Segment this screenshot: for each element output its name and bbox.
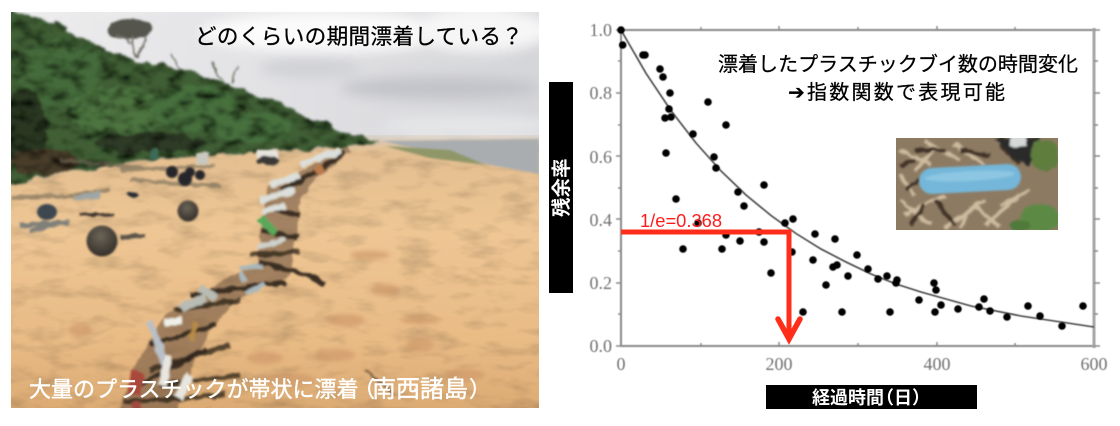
x-axis label: elapsed days: 経過時間: [812, 388, 884, 408]
caption: plastic band on beach: 大量のプラスチックが帯状に漂着: [29, 377, 359, 402]
arrow head: [778, 319, 800, 339]
y-axis tick labels: 0.8: [590, 83, 612, 103]
y-axis tick labels: 0.4: [590, 210, 612, 230]
mooring buoys: [37, 166, 205, 256]
y-axis tick labels: 0.0: [590, 336, 612, 356]
label: 1/e value: 1/e=0.368: [640, 211, 722, 231]
y-axis label: residual rate: 残余率: [550, 158, 573, 217]
y-axis tick labels: 0.2: [590, 273, 612, 293]
chart annotation text: ➔指数関数で表現可能: [788, 81, 1005, 104]
chart annotation text: [718, 52, 1078, 104]
data points: [617, 26, 1087, 330]
inset photo: blue plastic buoy: [896, 136, 1060, 232]
x-axis tick labels: 200: [766, 354, 792, 374]
chart annotation text: 漂着したプラスチックブイ数の時間変化: [718, 52, 1078, 76]
y-axis tick labels: 0.6: [590, 147, 612, 167]
x-axis label: elapsed days: [766, 385, 977, 409]
axes frame: [616, 26, 1100, 348]
red guide: 1/e value to elapsed time: [621, 232, 800, 340]
x-axis label: elapsed days: （: [876, 388, 894, 408]
exponential decay curve: [621, 30, 1094, 327]
y-axis tick labels: [590, 20, 612, 356]
debris: [11, 148, 395, 418]
chart: residual rate over elapsed days: [590, 20, 1108, 374]
x-axis tick labels: 0: [616, 354, 626, 374]
x-axis label: elapsed days: 日: [894, 388, 912, 408]
caption: plastic band on beach: 南西諸島: [372, 376, 468, 403]
x-axis tick labels: 600: [1080, 354, 1108, 374]
heading: how long stranded: どのくらいの期間漂着している？: [195, 24, 523, 49]
x-axis tick labels: 400: [924, 354, 950, 374]
photo: beach with plastic debris: [0, 5, 560, 418]
lone tree: [107, 19, 238, 84]
x-axis tick labels: [616, 354, 1108, 374]
caption: plastic band on beach: ）: [469, 377, 491, 402]
y-axis tick labels: 1.0: [590, 20, 612, 40]
x-axis label: elapsed days: ）: [912, 388, 930, 408]
caption: plastic band on beach: （: [353, 377, 375, 402]
vegetation: [0, 8, 382, 190]
y-axis label: residual rate: [549, 82, 573, 293]
